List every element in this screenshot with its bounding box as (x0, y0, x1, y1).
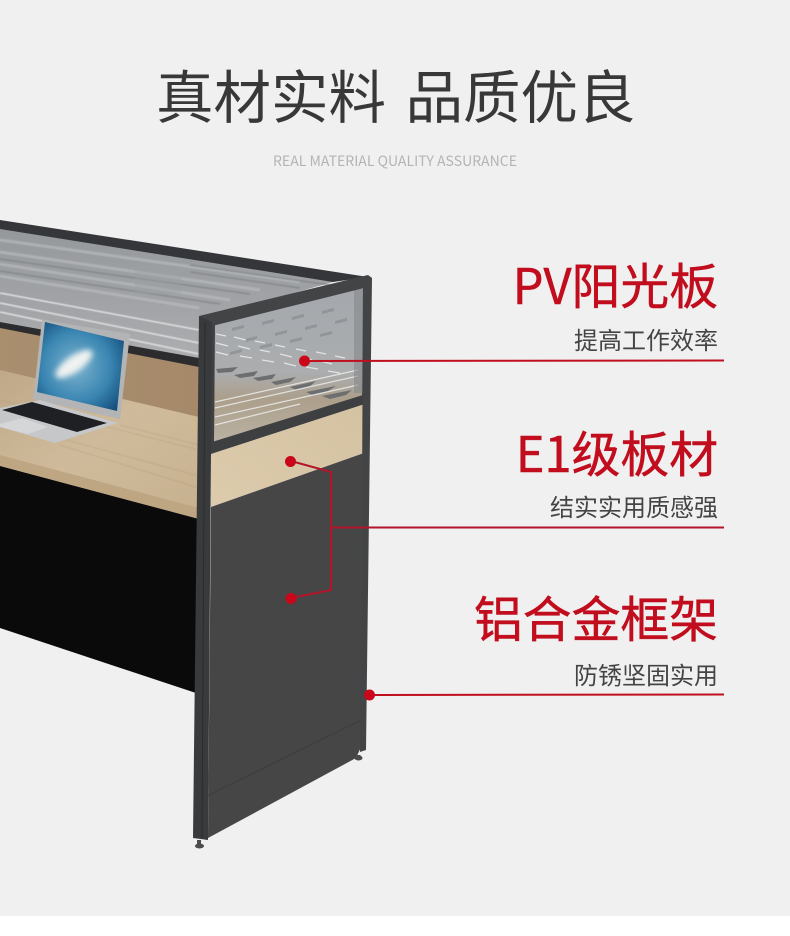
callout heading: PV阳光板 (513, 248, 718, 319)
callout heading: 铝合金框架 (474, 581, 718, 652)
back wood panel (0, 328, 199, 420)
leader dots (285, 456, 296, 604)
callout text: 结实实用质感强 (550, 488, 718, 523)
side panel glass (214, 288, 363, 442)
leader line (369, 694, 724, 696)
front post (193, 316, 212, 840)
laptop base (0, 400, 118, 443)
laptop (0, 320, 130, 443)
leader dot (364, 690, 375, 700)
callout: PV sheet (299, 248, 724, 366)
black under-desk panel (0, 466, 199, 694)
callout text: 防锈坚固实用 (574, 656, 718, 691)
back frame rail (0, 220, 368, 282)
side panel top rail (199, 275, 372, 326)
side panel frame backing (205, 280, 368, 456)
lower back strip (0, 322, 199, 370)
screen galaxy glow (51, 345, 97, 383)
desk front edge (0, 455, 199, 519)
desktop (0, 370, 199, 509)
rear post (360, 278, 372, 752)
dark lower panel (208, 453, 364, 838)
side panel mid rail (211, 395, 365, 454)
laptop lid (33, 320, 130, 419)
bracket leader (291, 461, 724, 598)
feet (195, 755, 362, 848)
title: 真材实料 (156, 51, 386, 135)
leader line (304, 360, 724, 362)
callout: aluminium frame (364, 581, 724, 700)
laptop keyboard (2, 402, 107, 432)
lower panel seam (207, 720, 361, 796)
title (156, 51, 636, 135)
side wood panel (211, 404, 365, 507)
back glass screen (0, 226, 340, 368)
laptop screen (37, 322, 124, 411)
title: 品质优良 (406, 51, 636, 135)
desktop grain (0, 400, 199, 488)
callout text: 提高工作效率 (574, 321, 718, 356)
laptop trackpad (0, 418, 48, 434)
workstation illustration (0, 220, 372, 848)
callout heading: E1级板材 (516, 416, 718, 487)
callout: E1 board (285, 416, 724, 604)
subtitle: REAL MATERIAL QUALITY ASSURANCE (273, 151, 517, 171)
leader dot (299, 356, 310, 366)
